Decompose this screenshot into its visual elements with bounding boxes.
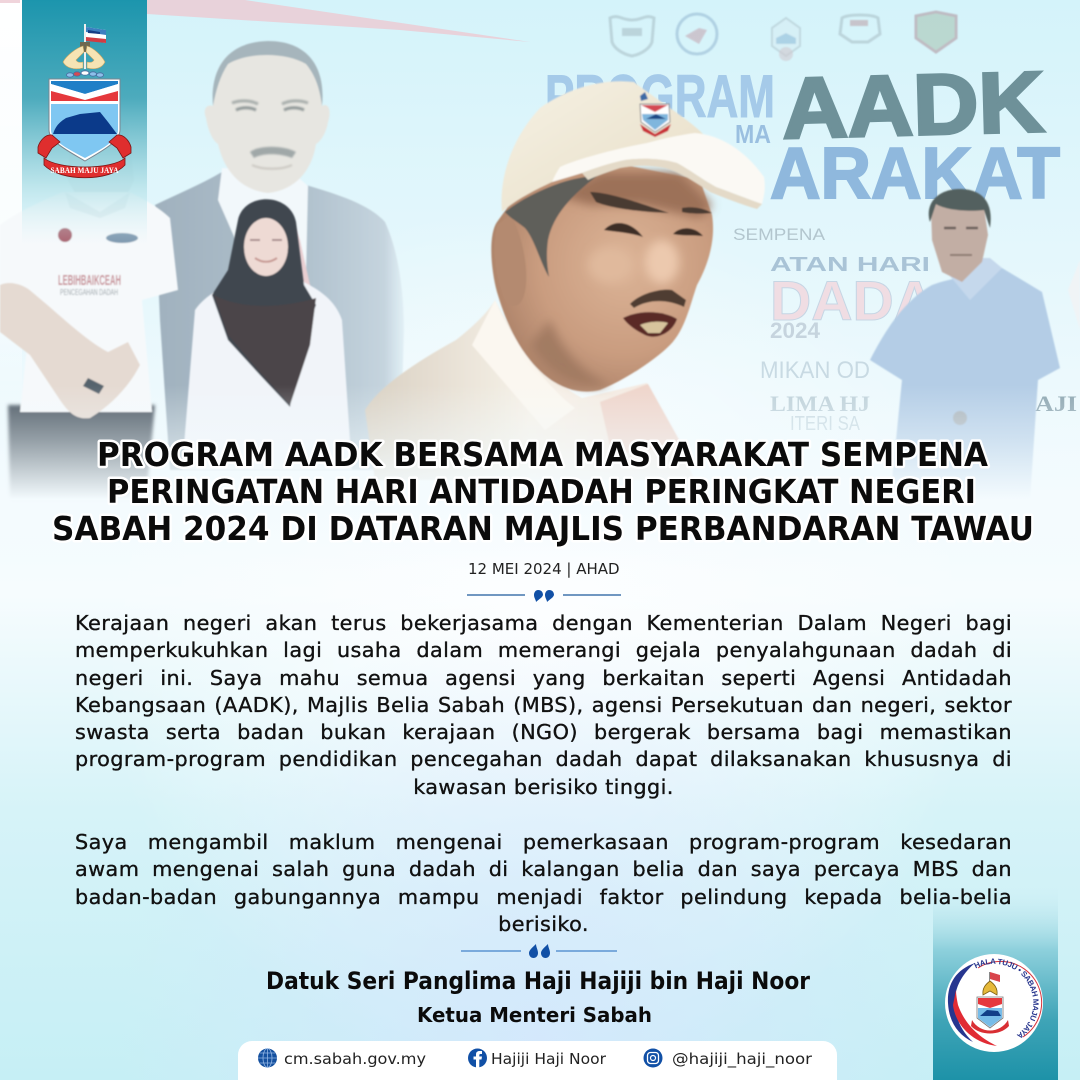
icon: Sabah coat of arms: SABAH MAJU JAYA <box>50 166 119 175</box>
date: 12 MEI 2024 | AHAD <box>468 560 620 578</box>
divider: closing quote <box>461 944 617 958</box>
background banner text: MIKAN OD <box>760 357 870 384</box>
hair <box>505 176 597 277</box>
background person: left man in white polo: PENCEGAHAN DADAH <box>60 288 118 297</box>
speaker name and role <box>266 967 810 1027</box>
jaw shadow <box>530 320 610 387</box>
icon: instagram <box>644 1048 662 1068</box>
icon: Sabah coat of arms <box>38 24 131 178</box>
background banner text: ITERI SA <box>790 413 861 435</box>
icon: globe <box>258 1048 277 1068</box>
paragraph two <box>75 830 1012 936</box>
contact labels: Hajiji Haji Noor <box>491 1050 607 1068</box>
background banner text: LIMA HJ <box>770 391 870 416</box>
teal band bottom right <box>933 880 1058 1080</box>
background banner text: PROGRAM <box>545 63 775 130</box>
face <box>491 160 713 392</box>
title: PERINGATAN HARI ANTIDADAH PERINGKAT NEGERI <box>107 472 976 511</box>
paragraph two: awam mengenai salah guna dadah di kalangan belia dan saya percaya MBS dan <box>75 857 1012 881</box>
paragraph two: badan-badan gabungannya mampu menjadi faktor pelindung kepada belia-belia <box>75 885 1012 909</box>
background person: woman in hijab <box>182 199 352 470</box>
background banner text: 2024 <box>770 318 821 343</box>
background banner text: ATAN HARI <box>770 254 930 276</box>
paragraph two: Saya mengambil maklum mengenai pemerkasaan program-program kesedaran <box>75 830 1012 854</box>
paragraph one: Kerajaan negeri akan terus bekerjasama dengan Kementerian Dalam Negeri bagi <box>75 611 1012 635</box>
forehead shadow <box>555 172 712 218</box>
background banner text: AADK <box>781 54 1045 157</box>
hair <box>213 41 323 106</box>
contact labels: @hajiji_haji_noor <box>672 1050 813 1069</box>
title: PROGRAM AADK BERSAMA MASYARAKAT SEMPENA <box>97 435 988 474</box>
cap peak <box>552 133 765 204</box>
mustache <box>630 290 686 308</box>
teal band top left <box>22 0 147 245</box>
background banner text: MA <box>735 119 771 149</box>
background person: right man in blue shirt <box>870 189 1080 500</box>
paragraph one: kawasan berisiko tinggi. <box>413 775 674 799</box>
mouth <box>623 312 677 337</box>
paragraph one: memperkukuhkan lagi usaha dalam memerangi gejala penyalahgunaan dadah di <box>75 638 1012 662</box>
background person: left man in white polo <box>0 112 178 500</box>
speaker name and role: Ketua Menteri Sabah <box>417 1003 652 1027</box>
background person: left man in white polo: LEBIHBAIKCEAH <box>58 272 121 289</box>
divider: opening quote <box>467 590 621 602</box>
background banner text: DADA <box>770 269 935 332</box>
nose highlight <box>645 240 679 284</box>
ribbon <box>38 135 60 158</box>
paragraph one: program-program pendidikan pencegahan dadah dapat dilaksanakan khususnya di <box>75 747 1012 771</box>
icon: facebook <box>468 1048 487 1068</box>
background banner text: SEMPENA <box>733 225 826 244</box>
paragraph one: swasta serta badan bukan kerajaan (NGO) bergerak bersama bagi memastikan <box>75 720 1012 744</box>
footer contact bar <box>238 1041 837 1080</box>
red streak behind header <box>0 0 530 42</box>
shield <box>49 79 120 161</box>
paragraph two: berisiko. <box>498 912 589 936</box>
title: SABAH 2024 DI DATARAN MAJLIS PERBANDARAN TAWAU <box>52 509 1034 548</box>
background person: man in suit <box>155 41 404 470</box>
title <box>52 435 1034 548</box>
brows and eyes <box>590 192 712 214</box>
cap logo <box>640 92 671 137</box>
contact labels: cm.sabah.gov.my <box>284 1050 426 1068</box>
head <box>205 42 330 193</box>
icon: Hala Tuju seal <box>945 954 1043 1052</box>
background banner text: AJI <box>1035 391 1077 416</box>
icon: Hala Tuju seal: HALA TUJU • SABAH MAJU JAYA <box>974 958 1039 1038</box>
faint partner logos <box>610 12 956 61</box>
paragraph one: negeri ini. Saya mahu semua agensi yang berkaitan seperti Agensi Antidadah <box>75 666 1012 690</box>
background banner text <box>545 54 1077 435</box>
paragraph one <box>75 611 1012 799</box>
paragraph one: Kebangsaan (AADK), Majlis Belia Sabah (MBS), agensi Persekutuan dan negeri, sektor <box>75 693 1012 717</box>
bottom fade over photographs <box>0 385 1080 570</box>
shirt <box>365 300 695 480</box>
background banner text: ARAKAT <box>770 134 1060 214</box>
contact labels <box>284 1050 813 1069</box>
main figure: man in cap <box>365 81 765 480</box>
cap crown <box>502 81 716 212</box>
